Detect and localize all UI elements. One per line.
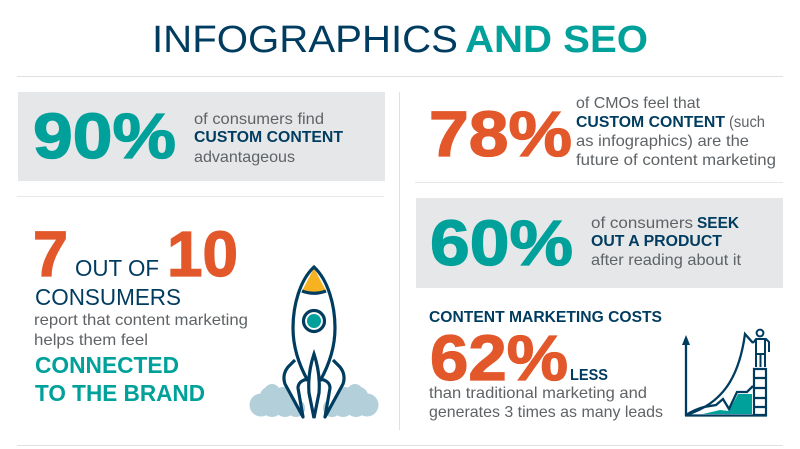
- icon: smoke clouds: [250, 384, 378, 417]
- rocket fins: [284, 360, 344, 417]
- panel: content marketing costs: [429, 309, 663, 421]
- panel: 90 percent stat: [18, 92, 385, 181]
- panel: 7 out of 10 consumers: 10: [167, 218, 238, 290]
- panel: 7 out of 10 consumers: TO THE BRAND: [35, 380, 205, 406]
- panel: 7 out of 10 consumers: OUT OF: [75, 255, 159, 281]
- panel: 78 percent stat: future of content marketing: [576, 152, 776, 169]
- panel: 78 percent stat: 78%: [429, 98, 572, 170]
- icon: rocket: [250, 267, 378, 418]
- panel: 7 out of 10 consumers: [33, 218, 248, 406]
- panel: 7 out of 10 consumers: 7: [33, 218, 68, 290]
- panel: content marketing costs: LESS: [570, 367, 608, 384]
- panel: 78 percent stat: CUSTOM CONTENT: [576, 114, 725, 131]
- panel: 60 percent stat: SEEK: [697, 215, 739, 232]
- title: INFOGRAPHICS: [152, 19, 458, 61]
- panel: 90 percent stat: advantageous: [194, 149, 295, 166]
- panel: 90 percent stat: 90%: [33, 100, 176, 172]
- panel: 60 percent stat: [416, 198, 783, 288]
- panel: 78 percent stat: (such: [729, 114, 765, 131]
- panel: content marketing costs: 62%: [430, 322, 568, 394]
- panel: 60 percent stat: after reading about it: [591, 252, 742, 269]
- panel: 78 percent stat: [429, 95, 776, 170]
- panel: content marketing costs: generates 3 times as many leads: [429, 404, 663, 421]
- panel: 60 percent stat: 60%: [430, 207, 573, 279]
- panel: content marketing costs: than traditional marketing and: [429, 385, 647, 402]
- icon: growth chart with person on ladder: [682, 330, 769, 416]
- rocket body: [293, 267, 335, 381]
- panel: 7 out of 10 consumers: CONNECTED: [35, 352, 179, 378]
- panel: 78 percent stat: as infographics) are the: [576, 133, 749, 150]
- panel: 78 percent stat: of CMOs feel that: [576, 95, 701, 112]
- panel: 7 out of 10 consumers: CONSUMERS: [35, 284, 181, 310]
- panel: 7 out of 10 consumers: helps them feel: [34, 332, 148, 349]
- panel: 90 percent stat: CUSTOM CONTENT: [194, 129, 343, 146]
- panel: content marketing costs: CONTENT MARKETING COSTS: [429, 309, 662, 326]
- panel: 60 percent stat: OUT A PRODUCT: [591, 233, 722, 250]
- panel: 60 percent stat: of consumers: [591, 215, 693, 232]
- title: AND SEO: [465, 19, 648, 61]
- title: [152, 19, 648, 61]
- panel: 90 percent stat: of consumers find: [194, 111, 324, 128]
- panel: 7 out of 10 consumers: report that content marketing: [34, 312, 248, 329]
